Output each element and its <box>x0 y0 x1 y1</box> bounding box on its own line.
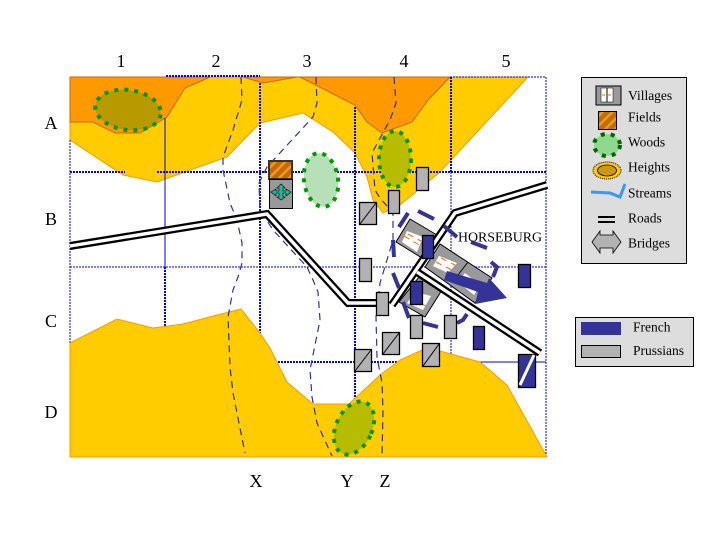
label: woods: Woods <box>628 135 665 150</box>
legend: terrain <box>582 78 686 264</box>
terrain: upper summit <box>70 77 210 133</box>
legend: armies <box>576 318 694 366</box>
village south <box>399 277 442 317</box>
column labels <box>116 51 510 71</box>
panel: map <box>70 76 547 461</box>
stream labels <box>250 471 390 491</box>
road: southeast <box>417 272 540 353</box>
stream labels: X <box>250 471 262 491</box>
stream Z <box>372 77 396 457</box>
French defensive line around Horseburg <box>393 211 497 327</box>
icon: village <box>596 86 621 105</box>
icon: road <box>598 217 615 222</box>
icon: bridge <box>592 231 621 253</box>
label: roads: Roads <box>628 211 662 226</box>
village east <box>425 244 492 303</box>
stream Y <box>259 77 332 456</box>
row labels: A <box>44 113 58 133</box>
row labels <box>44 113 58 422</box>
swatch: French <box>581 322 621 335</box>
row labels: C <box>45 311 57 331</box>
stream labels: Z <box>380 471 390 491</box>
village north <box>396 219 437 258</box>
row labels: B <box>45 209 57 229</box>
road: west <box>70 214 382 303</box>
French advance arrow <box>444 271 507 304</box>
French units <box>410 236 536 388</box>
row labels: D <box>44 402 58 422</box>
terrain: upper heights <box>70 77 528 213</box>
column labels: 2 <box>212 51 220 71</box>
column labels: 5 <box>502 51 510 71</box>
terrain: central summit <box>243 77 450 133</box>
label: villages: Villages <box>628 88 672 103</box>
column labels: 3 <box>302 51 312 71</box>
woods: A1 <box>93 86 163 134</box>
woods: D4 <box>326 395 382 461</box>
icon: field <box>598 112 616 130</box>
label: bridges: Bridges <box>628 236 670 251</box>
swatch: Prussians <box>582 346 620 358</box>
column labels: 4 <box>400 51 408 71</box>
label: Prussians: Prussians <box>633 343 684 358</box>
terrain: lower heights <box>70 309 547 457</box>
icon: stream <box>591 184 625 197</box>
road: northeast <box>392 185 547 305</box>
label: French: French <box>633 320 671 335</box>
icon: woods <box>594 134 620 156</box>
woods: A4 <box>379 131 411 187</box>
town label: HORSEBURG <box>458 230 542 246</box>
label: streams: Streams <box>628 186 672 201</box>
label: heights: Heights <box>628 160 670 175</box>
label: fields: Fields <box>628 110 661 125</box>
icon: heights <box>593 162 621 179</box>
field and bridge at B3 <box>269 161 292 208</box>
stream X <box>223 77 245 453</box>
column labels: 1 <box>116 51 126 71</box>
map grid <box>70 76 546 458</box>
Prussian units <box>354 168 456 372</box>
stream labels: Y <box>340 471 354 491</box>
woods: B3 <box>300 151 342 209</box>
